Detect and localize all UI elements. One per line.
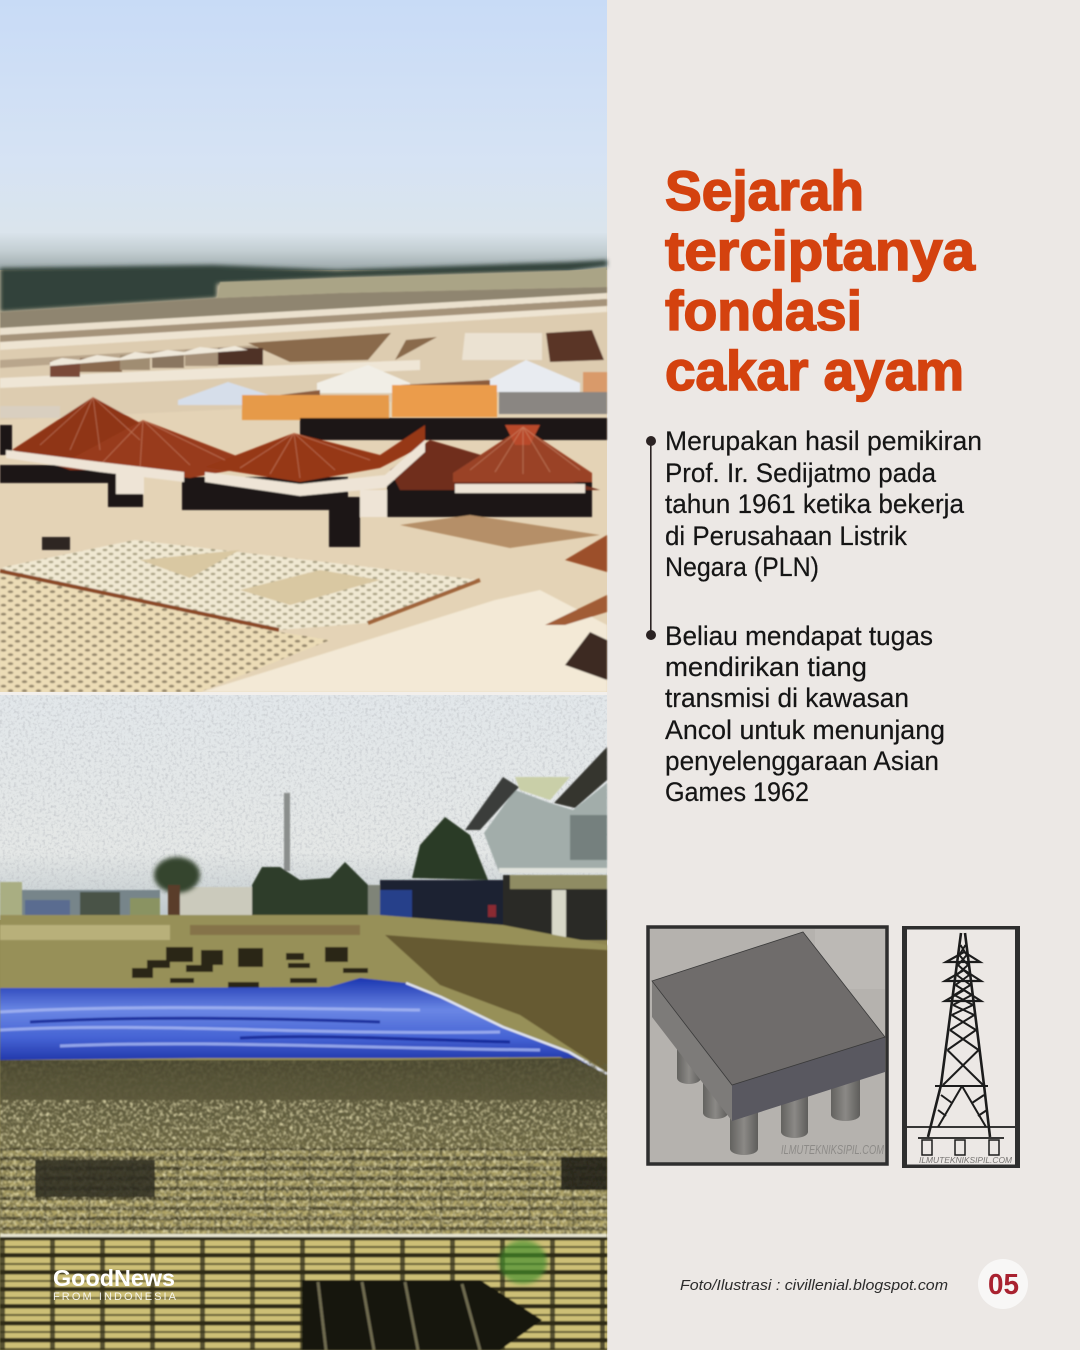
brown earth patches	[248, 330, 604, 362]
dark understructure	[0, 418, 607, 547]
text block: first point: di Perusahaan Listrik	[665, 521, 907, 551]
tiled foundation grounds	[0, 540, 480, 630]
text block: first point	[665, 426, 982, 582]
diagram: pile cap foundation	[648, 927, 887, 1164]
title: fondasi	[665, 279, 862, 342]
title: Sejarah	[665, 159, 864, 222]
title: terciptanya	[665, 219, 976, 282]
title	[665, 159, 976, 402]
text block: second point: Ancol untuk menunjang	[665, 715, 945, 745]
text block: first point: Prof. Ir. Sedijatmo pada	[665, 458, 937, 488]
horizon tree line	[0, 260, 607, 312]
text block: second point: penyelenggaraan Asian	[665, 746, 939, 776]
photo credit: Foto/Ilustrasi : civillenial.blogspot.com	[680, 1277, 948, 1294]
text block: first point: Merupakan hasil pemikiran	[665, 426, 982, 456]
logo: GoodNews from Indonesia	[53, 1265, 177, 1303]
field with dark block rows	[0, 915, 607, 1075]
background building	[465, 747, 607, 940]
diagram: transmission tower	[902, 926, 1020, 1168]
text block: second point: mendirikan tiang	[665, 652, 867, 682]
text block: second point: Beliau mendapat tugas	[665, 621, 933, 651]
background vehicles and trees	[0, 817, 503, 927]
blue tarp	[0, 978, 600, 1070]
sand strip	[201, 590, 607, 692]
white deck edges	[6, 440, 585, 517]
text block: first point: tahun 1961 ketika bekerja	[665, 489, 965, 519]
white rebar line	[0, 1234, 607, 1237]
text block: second point: transmisi di kawasan	[665, 683, 909, 713]
image gap strip	[0, 692, 607, 695]
photo: rebar mesh foundation with blue tarp	[0, 695, 607, 1350]
dark openings in the mesh	[35, 1157, 607, 1350]
page number badge	[978, 1259, 1028, 1309]
orange and grey terminal boxes	[0, 372, 607, 420]
green plant	[499, 1240, 547, 1284]
white tent roofs	[178, 360, 580, 405]
rebar mesh ground	[0, 1058, 607, 1350]
page number badge: 05	[988, 1269, 1019, 1301]
bullet timeline	[646, 436, 656, 640]
logo: GoodNews from Indonesia: GoodNews	[53, 1265, 175, 1291]
photo: airport terminal under construction	[0, 0, 607, 692]
red roof structures	[12, 397, 600, 490]
text block: second point: Games 1962	[665, 777, 809, 807]
title: cakar ayam	[665, 339, 964, 402]
row of small huts	[50, 346, 263, 377]
pole	[284, 793, 290, 871]
diagram: pile cap foundation: ILMUTEKNIKSIPIL.COM	[781, 1143, 884, 1157]
text block: second point	[665, 621, 945, 807]
diagram: transmission tower: ILMUTEKNIKSIPIL.COM	[919, 1155, 1013, 1165]
logo: GoodNews from Indonesia: FROM INDONESIA	[53, 1291, 177, 1303]
text block: first point: Negara (PLN)	[665, 552, 819, 582]
right panel background	[607, 0, 1080, 1350]
